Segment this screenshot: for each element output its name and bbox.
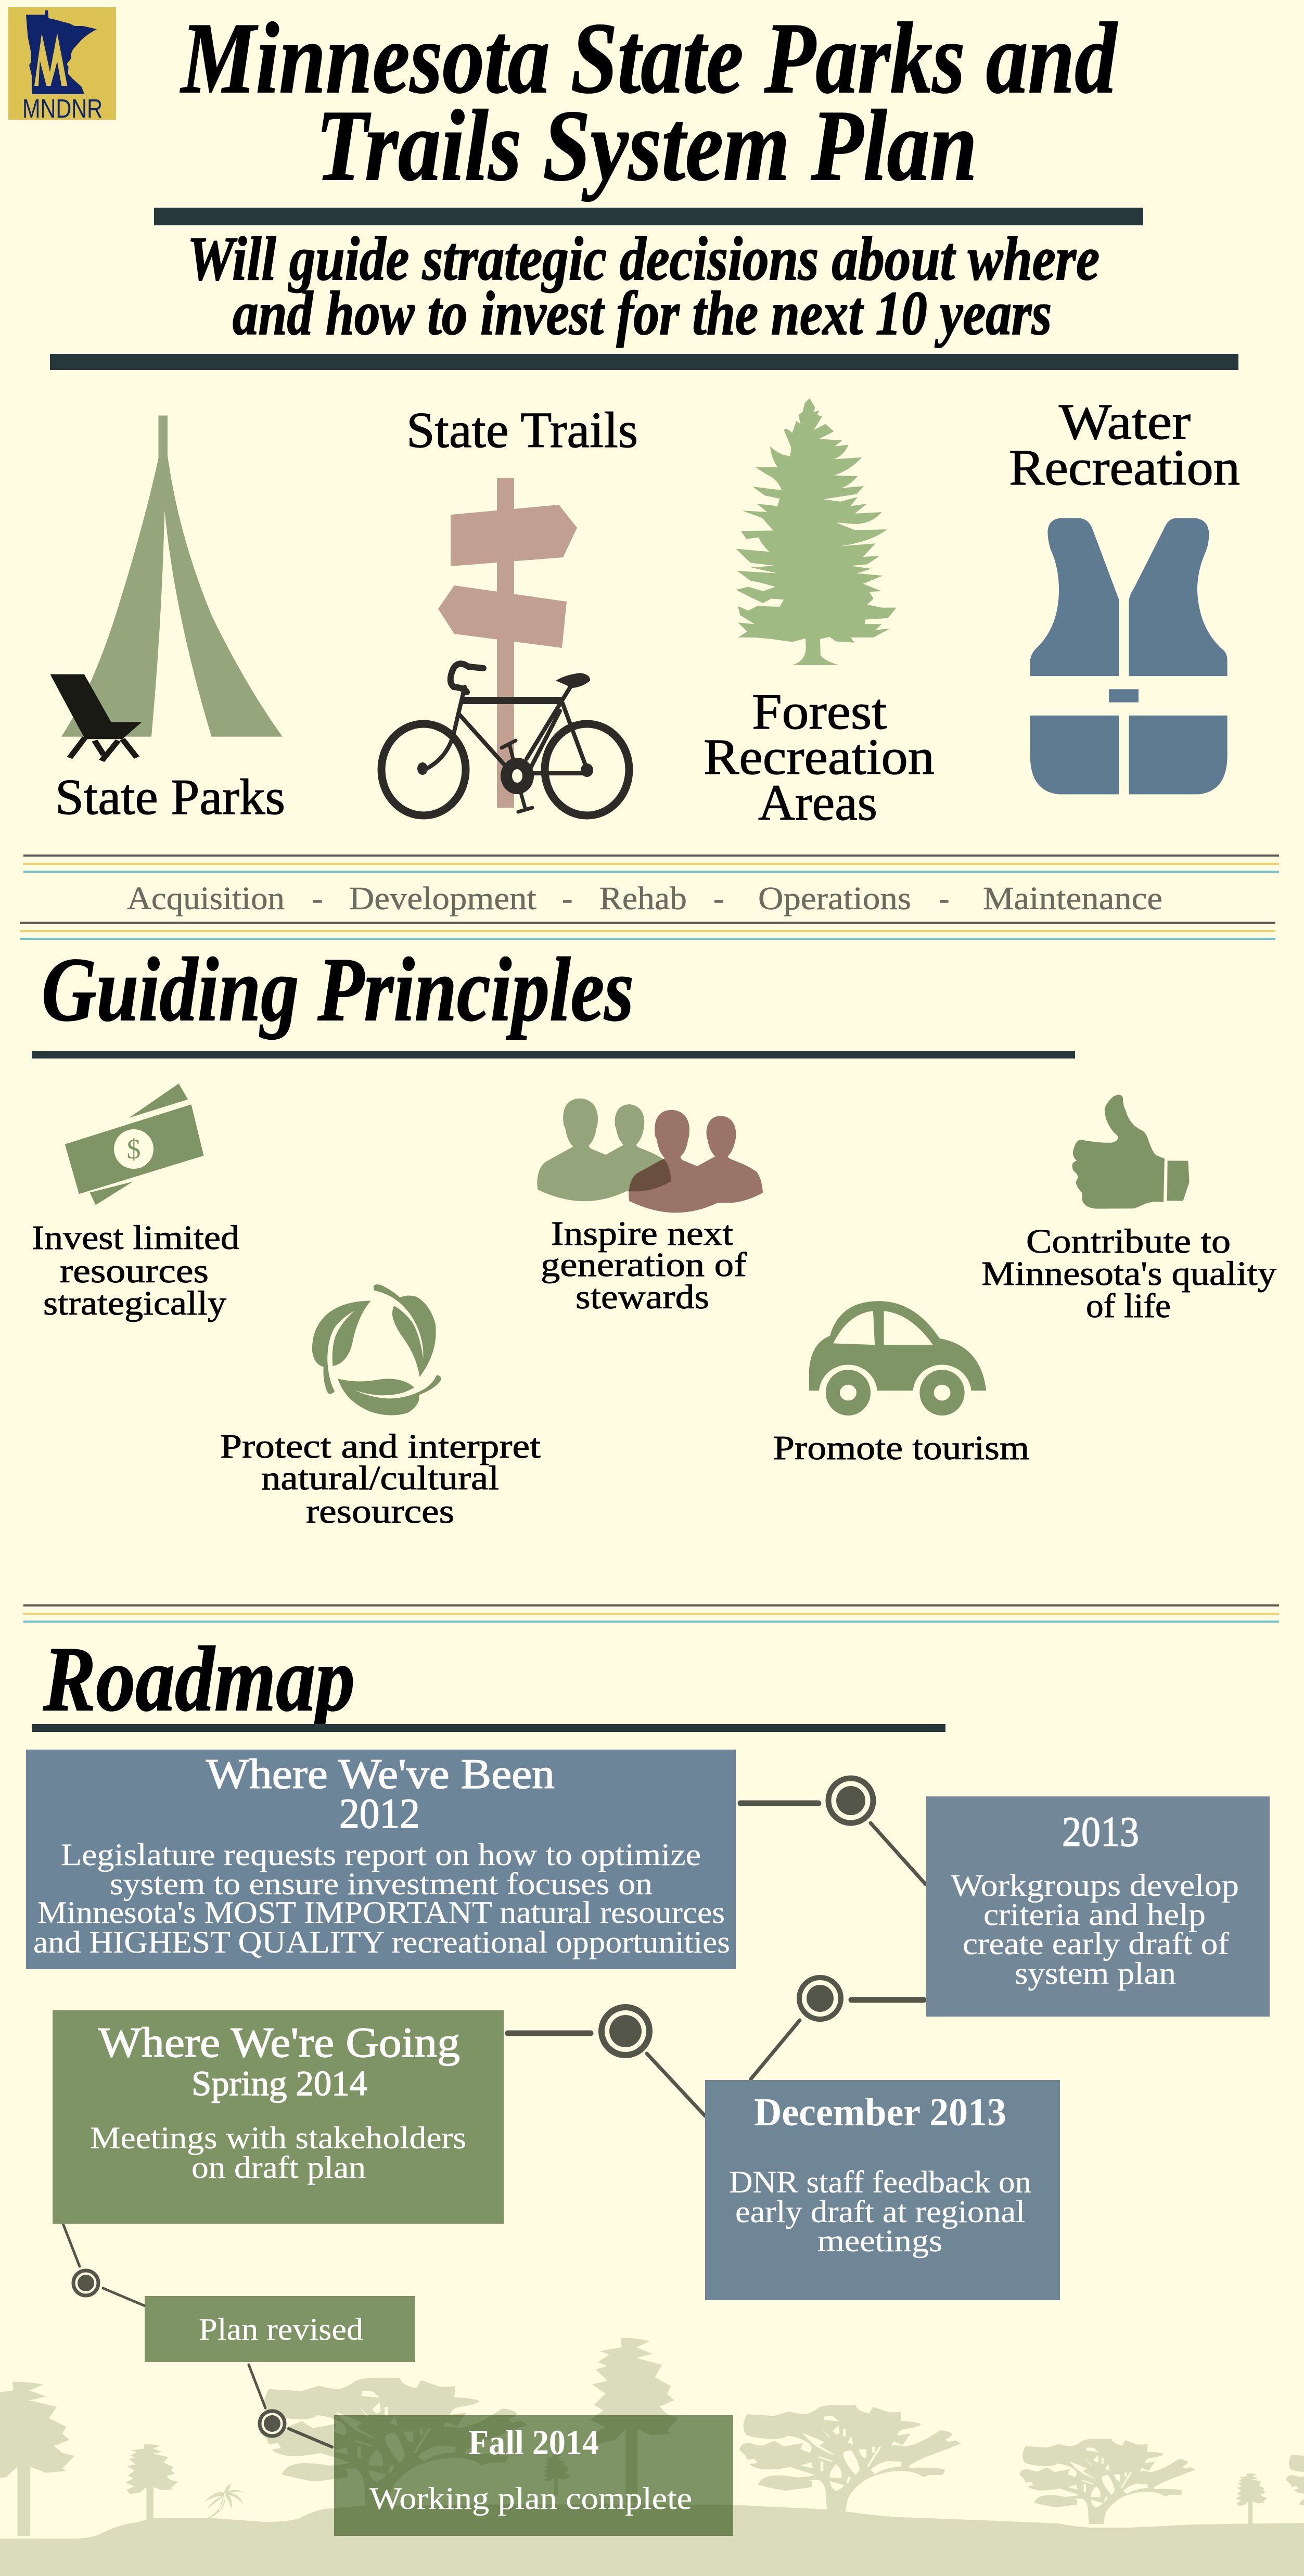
text: working plan complete: Working plan complete <box>369 2481 692 2516</box>
text: 2013 description <box>951 1868 1239 1991</box>
stripes middle <box>20 923 1275 939</box>
timeline marker 5 <box>260 2411 285 2436</box>
text: 2013 description: create early draft of <box>963 1927 1229 1961</box>
principle: protect resources <box>220 1284 541 1531</box>
panel: plan revised <box>145 2296 415 2362</box>
icon: car <box>809 1301 986 1421</box>
roadmap rule <box>32 1724 945 1732</box>
investment types row: Acquisition <box>127 881 285 916</box>
label: Water Recreation: Recreation <box>1009 440 1240 495</box>
landscape background <box>0 2338 1304 2576</box>
panel: water recreation <box>1009 394 1240 794</box>
heading: where we've been <box>206 1750 555 1837</box>
stripes bottom <box>23 1605 1279 1622</box>
icon: thumbs up <box>1072 1094 1190 1209</box>
heading: where we're going: Spring 2014 <box>191 2063 367 2103</box>
guiding principles rule <box>32 1051 1075 1059</box>
investment types row <box>127 881 1162 916</box>
subtitle <box>187 224 1100 348</box>
icon: bicycle <box>381 664 629 815</box>
text: protect: natural/cultural <box>261 1459 499 1497</box>
title rule <box>154 208 1143 225</box>
panel: forest recreation areas <box>704 398 935 831</box>
icon: leaves <box>312 1284 441 1415</box>
logo: MNDNR: MNDNR <box>22 94 103 123</box>
principle: inspire stewards <box>537 1099 763 1316</box>
stripes top <box>23 856 1279 872</box>
heading: Guiding Principles: Guiding Principles <box>42 939 634 1040</box>
text: december description: meetings <box>817 2224 942 2258</box>
logo: MNDNR <box>8 7 116 123</box>
text: 2012 description <box>33 1838 730 1959</box>
investment types row: - <box>312 881 323 916</box>
heading: december 2013: December 2013 <box>754 2090 1006 2134</box>
heading: 2013: 2013 <box>1062 1808 1139 1855</box>
investment types row: Development <box>349 881 536 916</box>
text: inspire: Inspire next <box>551 1215 733 1253</box>
text: protect: resources <box>306 1493 454 1531</box>
label: State Parks: State Parks <box>55 769 285 825</box>
text: invest: resources <box>60 1252 209 1290</box>
text: invest: strategically <box>43 1284 226 1322</box>
panel: where we're going spring 2014 <box>53 2010 504 2224</box>
panel: december 2013 <box>705 2080 1060 2300</box>
icon: chair <box>50 674 142 761</box>
text: 2012 description: Legislature requests report on how to optimize <box>61 1838 701 1872</box>
label: Forest Recreation Areas: Recreation <box>704 729 935 785</box>
heading: fall 2014: Fall 2014 <box>468 2422 599 2462</box>
subtitle rule <box>50 354 1238 370</box>
heading: where we're going: Where We're Going <box>98 2019 460 2066</box>
heading: where we're going <box>98 2019 460 2103</box>
principle: invest limited resources <box>32 1083 239 1322</box>
text: contribute: of life <box>1086 1287 1171 1325</box>
icon: money: $ <box>127 1133 140 1165</box>
text: tourism: Promote tourism <box>773 1429 1029 1467</box>
text: contribute: Minnesota's quality <box>981 1255 1276 1293</box>
investment types row: - <box>939 881 950 916</box>
label: Water Recreation: Water <box>1059 394 1191 450</box>
text: contribute <box>981 1222 1276 1325</box>
subtitle: Will guide strategic decisions about where <box>187 224 1100 293</box>
text: 2013 description: criteria and help <box>983 1897 1206 1932</box>
panel: 2013 <box>926 1796 1270 2017</box>
timeline marker 2 <box>799 1978 841 2019</box>
panel: state parks <box>50 416 285 825</box>
icon: tent <box>61 416 283 737</box>
text: 2013 description: Workgroups develop <box>951 1868 1239 1903</box>
timeline marker 3 <box>602 2007 649 2055</box>
icon: money <box>65 1083 204 1205</box>
text: december description: early draft at regional <box>735 2195 1025 2229</box>
text: spring 2014 description <box>90 2121 466 2185</box>
text: 2012 description: and HIGHEST QUALITY recreational opportunities <box>33 1925 730 1959</box>
investment types row: - <box>562 881 573 916</box>
text: invest <box>32 1219 239 1322</box>
text: 2012 description: Minnesota's MOST IMPORTANT natural resources <box>37 1895 725 1930</box>
label: Forest Recreation Areas: Forest <box>752 684 887 739</box>
text: 2013 description: system plan <box>1015 1956 1176 1991</box>
timeline marker 1 <box>828 1778 873 1823</box>
text: december description <box>729 2165 1031 2258</box>
text: protect: Protect and interpret <box>220 1427 541 1465</box>
icon: people <box>537 1099 763 1213</box>
label: Water Recreation <box>1009 394 1240 495</box>
text: spring 2014 description: on draft plan <box>191 2150 366 2185</box>
label: Forest Recreation Areas <box>704 684 935 831</box>
investment types row: Rehab <box>599 881 687 916</box>
heading: where we've been: Where We've Been <box>206 1750 555 1797</box>
text: invest: Invest limited <box>32 1219 239 1257</box>
icon: signpost <box>438 478 577 808</box>
timeline connectors <box>63 1803 926 2447</box>
panel: state trails <box>381 402 638 815</box>
timeline marker 4 <box>73 2271 98 2296</box>
title: Trails System Plan <box>316 90 977 202</box>
principle: quality of life <box>981 1094 1276 1325</box>
text: inspire: stewards <box>576 1278 709 1316</box>
label: Forest Recreation Areas: Areas <box>758 775 877 831</box>
text: protect <box>220 1427 541 1531</box>
text: inspire: generation of <box>541 1246 747 1284</box>
icon: pine tree <box>736 398 897 665</box>
panel: where we've been 2012 <box>26 1750 736 1969</box>
icon: life vest <box>1030 518 1228 794</box>
text: contribute: Contribute to <box>1026 1222 1231 1260</box>
investment types row: Operations <box>758 881 911 916</box>
text: 2012 description: system to ensure investment focuses on <box>110 1867 653 1901</box>
subtitle: and how to invest for the next 10 years <box>233 278 1052 348</box>
heading: where we've been: 2012 <box>339 1790 420 1837</box>
panel: plan revised: Plan revised <box>199 2312 363 2347</box>
text: december description: DNR staff feedback on <box>729 2165 1031 2199</box>
investment types row: - <box>713 881 724 916</box>
title <box>180 2 1118 202</box>
investment types row: Maintenance <box>983 881 1162 916</box>
heading: Roadmap: Roadmap <box>43 1627 355 1730</box>
text: inspire <box>541 1215 747 1316</box>
title: Minnesota State Parks and <box>180 2 1118 114</box>
panel: fall 2014 <box>334 2415 733 2536</box>
principle: promote tourism <box>773 1301 1029 1467</box>
label: State Trails: State Trails <box>406 402 638 458</box>
text: spring 2014 description: Meetings with stakeholders <box>90 2121 466 2155</box>
